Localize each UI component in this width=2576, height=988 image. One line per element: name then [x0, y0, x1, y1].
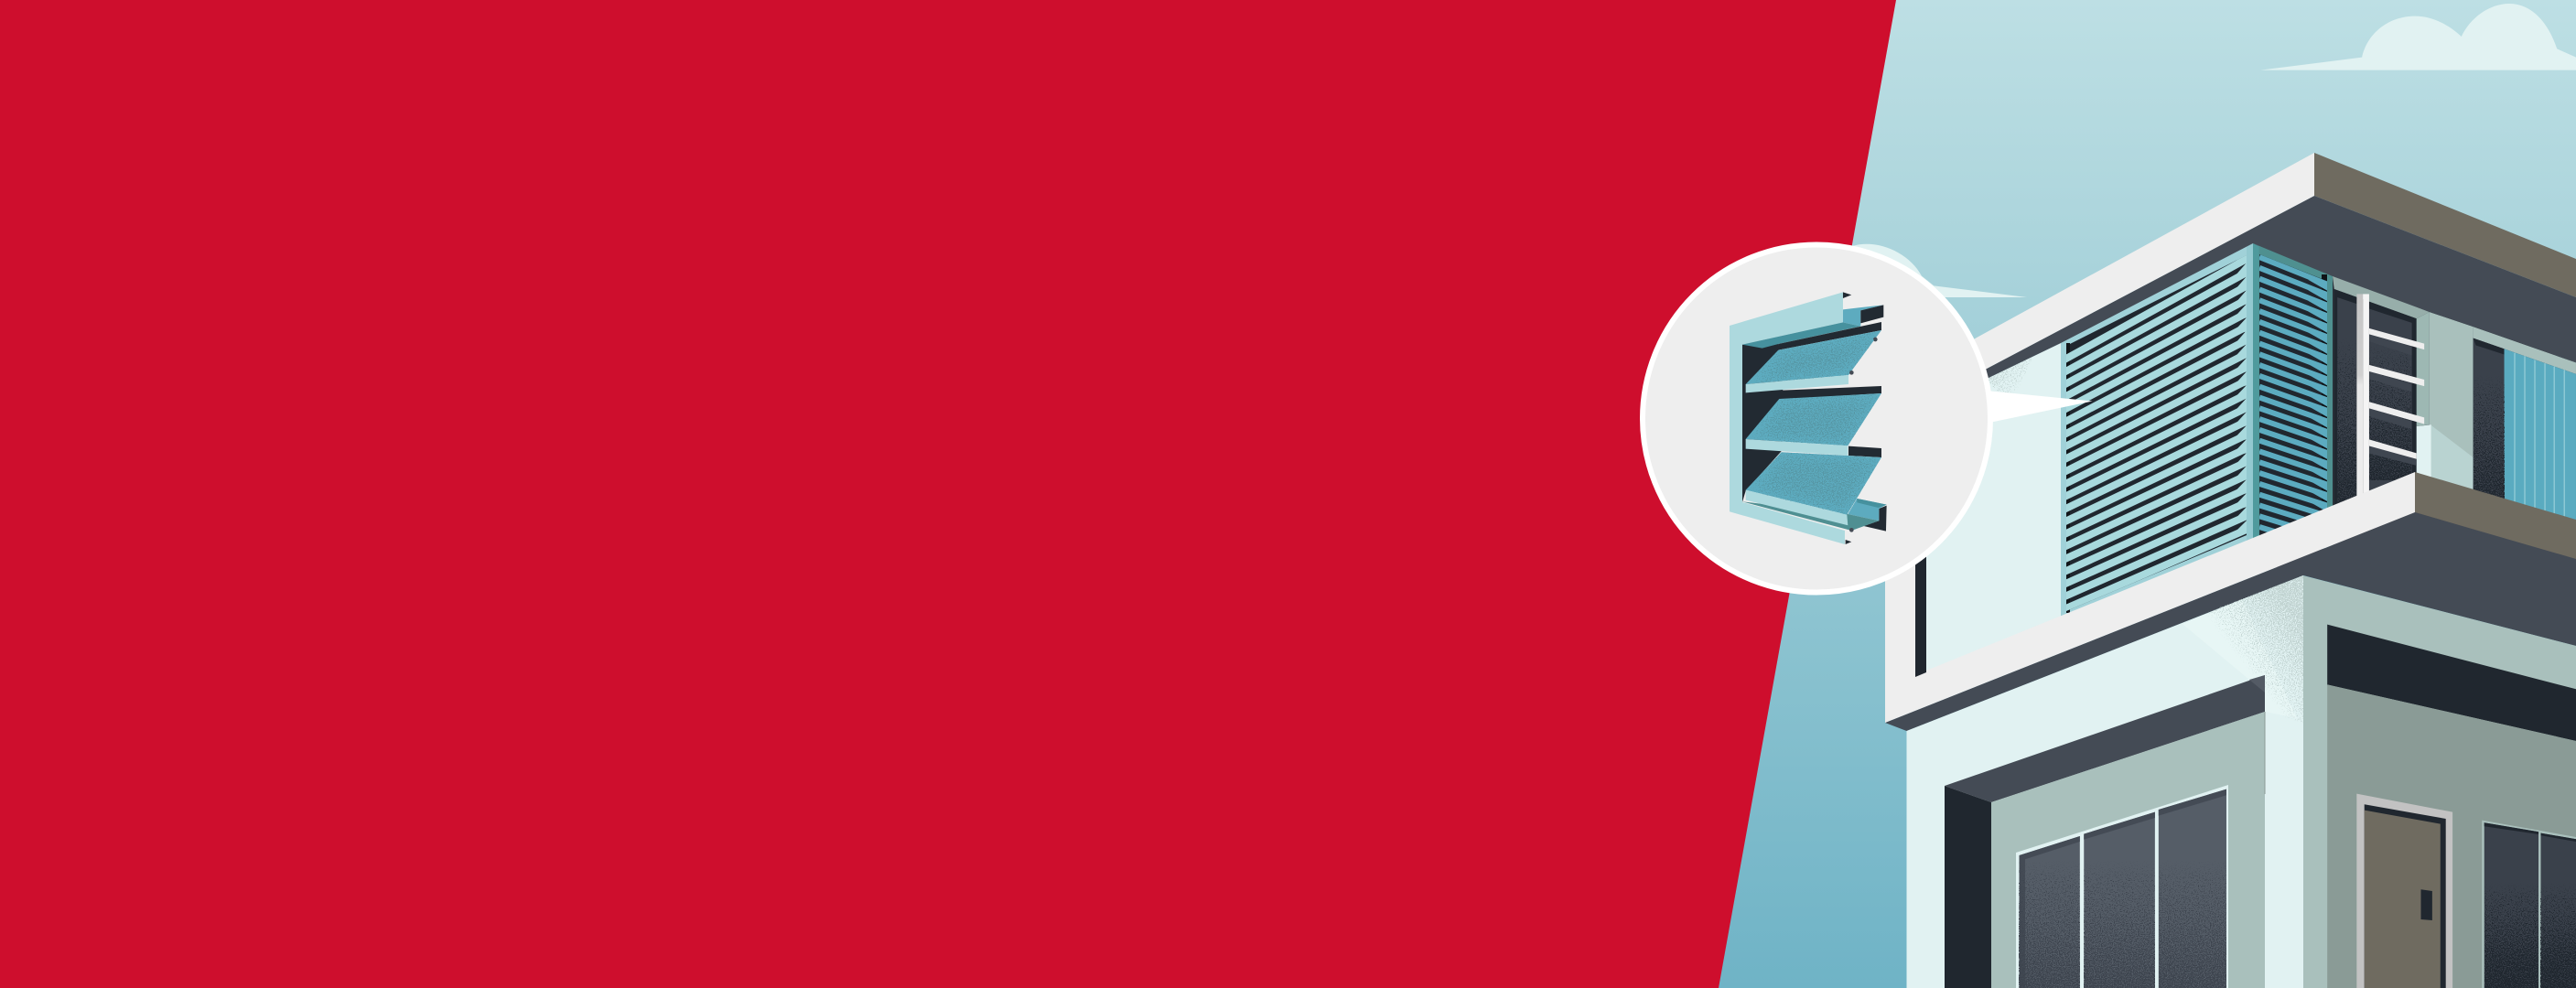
stippled shading: upper wall — [1989, 358, 2032, 393]
corner line — [2264, 712, 2266, 794]
louvre: left face — [2059, 243, 2253, 617]
roof: brown fascia — [2314, 153, 2576, 297]
stippled shading: ground floor panes — [2019, 860, 2227, 988]
illustration: red panel and building with louvre callout — [1640, 0, 2576, 988]
sky background — [1647, 0, 2576, 988]
lower slab: brown fascia — [2415, 472, 2576, 559]
ground floor: left face — [1907, 575, 2303, 988]
upper floor wall — [1926, 343, 2061, 682]
icon: louvre detail — [1730, 292, 1887, 544]
upper building backing — [2253, 243, 2576, 567]
roof: soffit — [1967, 196, 2576, 389]
white post and balcony bars — [2356, 294, 2424, 497]
upper windows and column — [2333, 274, 2576, 530]
roof: white slab — [1940, 153, 2314, 393]
callout circle — [1643, 245, 1990, 593]
lower slab: white slab and column — [1885, 366, 2415, 723]
red panel — [0, 0, 1896, 988]
stippled window shading: upper — [2337, 338, 2505, 508]
stippled shading: right window — [2484, 883, 2576, 988]
louvre: right face — [2258, 243, 2333, 558]
ground floor: right face — [2303, 575, 2576, 988]
cloud: top right — [2260, 4, 2576, 70]
dark strip on left column — [1915, 366, 1926, 677]
stippled shading: ground floor corner — [2207, 575, 2303, 723]
louvre: corner post — [2247, 243, 2258, 558]
ground floor: window panes — [2020, 789, 2226, 988]
callout pointer — [1967, 389, 2092, 427]
cloud: behind callout — [1824, 244, 2027, 297]
lower slab soffit — [1885, 512, 2576, 731]
